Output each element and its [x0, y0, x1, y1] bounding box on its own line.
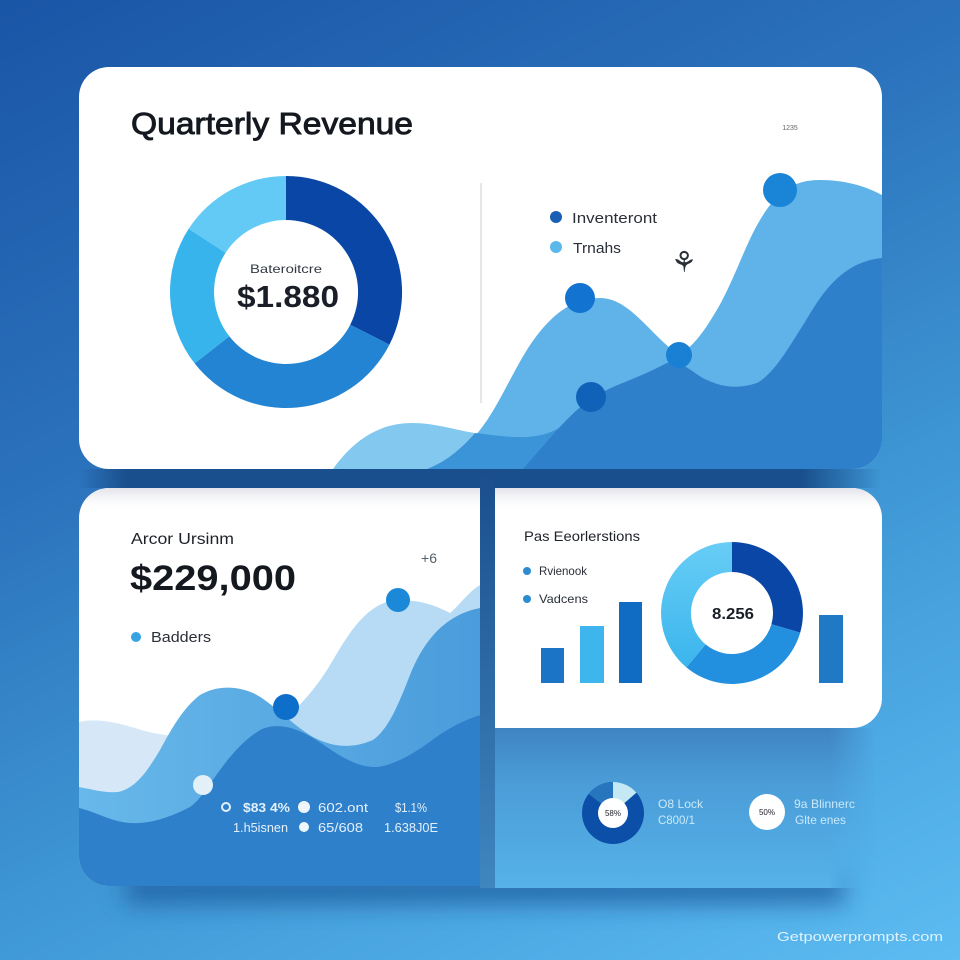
- stat caption two: 9a Blinnerc: [794, 797, 855, 811]
- heading: Arcor Ursinm: [131, 531, 234, 548]
- mini badge: 50%: [759, 808, 775, 817]
- main value: $229,000: [130, 559, 296, 598]
- icon: small glyph: ⚘: [671, 247, 697, 279]
- chart markers: [193, 588, 410, 795]
- stats rows: 602.ont: [318, 800, 368, 815]
- watermark: Getpowerprompts.com: [777, 929, 943, 944]
- panel background: [495, 728, 875, 888]
- card top shading: [495, 488, 880, 507]
- legend: [550, 210, 658, 257]
- stat caption one: [658, 797, 704, 827]
- area chart: [333, 180, 882, 469]
- stat caption two: Glte enes: [795, 813, 846, 827]
- stat caption one: O8 Lock: [658, 797, 704, 811]
- stats rows: 1.h5isnen: [233, 820, 288, 835]
- small top-right note: 1235: [782, 125, 798, 132]
- stat caption one: C800/1: [658, 813, 695, 827]
- stats rows: 65/608: [318, 820, 363, 835]
- donut label: Bateroitcre: [250, 262, 322, 276]
- legend: [131, 629, 211, 646]
- mini donut: [582, 782, 644, 844]
- stats rows: 1.638J0E: [384, 820, 438, 835]
- panel: lower right stats: [495, 728, 875, 888]
- card background: [79, 67, 882, 469]
- mini badge: [749, 794, 785, 830]
- card background: [79, 488, 480, 886]
- donut value: $1.880: [237, 279, 339, 314]
- panel: quarterly revenue: [79, 67, 882, 469]
- donut chart: [170, 176, 402, 408]
- panel: data breakdown: [495, 488, 882, 728]
- legend: Rvienook: [539, 564, 588, 578]
- donut value: 8.256: [712, 606, 754, 623]
- card background: [495, 488, 882, 728]
- stat caption two: [794, 797, 855, 827]
- legend: Trnahs: [573, 240, 621, 257]
- heading: Pas Eeorlerstions: [524, 528, 640, 544]
- bar chart: [541, 602, 843, 683]
- card shadows: [79, 469, 882, 904]
- stats rows: $1.1%: [395, 800, 427, 815]
- legend: Inventeront: [572, 210, 658, 227]
- legend: [523, 564, 588, 606]
- legend: Badders: [151, 629, 211, 646]
- chart markers: [565, 173, 797, 412]
- card top shading: [81, 488, 480, 507]
- area chart: [79, 585, 480, 886]
- stats rows: $83 4%: [243, 800, 290, 815]
- panel: annual summary: [79, 488, 480, 886]
- small note: +6: [421, 550, 437, 566]
- mini donut: 58%: [605, 809, 621, 818]
- donut chart: [661, 542, 803, 684]
- heading: Quarterly Revenue: [131, 106, 413, 141]
- stats rows: [222, 800, 438, 835]
- legend: Vadcens: [539, 592, 588, 606]
- divider: [480, 183, 482, 403]
